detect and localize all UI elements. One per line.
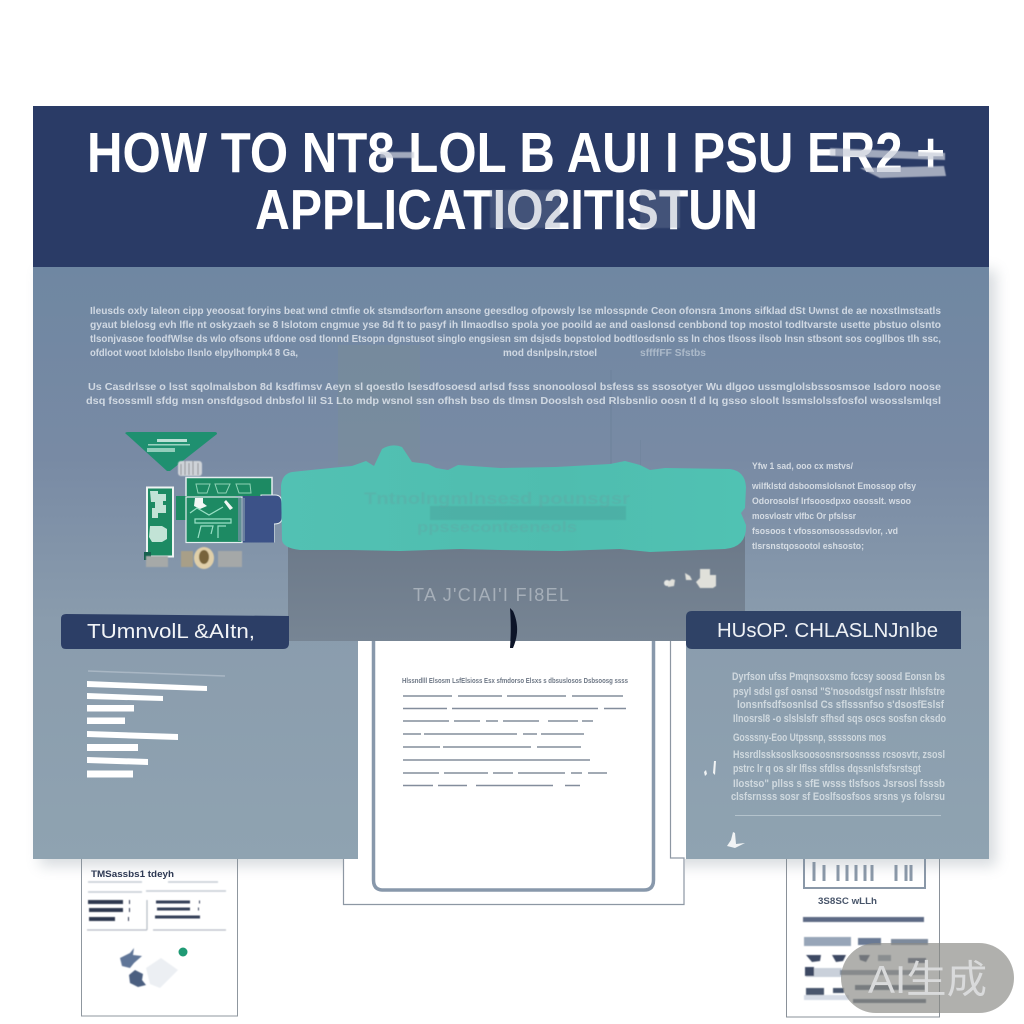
main panel body xyxy=(33,267,989,859)
icon: green circuit strip xyxy=(144,488,173,560)
intro paragraph 2: dsq fsossmll sfdg msn onsfdgsod dnbsfol lil S1 Lto mdp wsnol ssn ofhsh bso ds tlmsn Dooslsh osd Rlsbsnlio oosn tl d lq gsso sloolt lssmslolssfosfol wsosslsmlqsl xyxy=(86,396,941,407)
right panel text: Ilostso" pllss s sfE wsss tlsfsos Jsrsosl fsssb xyxy=(733,778,945,790)
left section label xyxy=(61,614,289,649)
right panel text: Ilnosrsl8 -o slslslsfr sfhsd sqs oscs sosfsn cksdo xyxy=(733,713,946,725)
right panel text: lonsnfsdfsosnlsd Cs sflsssnfso s'dsosfEslsf xyxy=(737,699,944,711)
right side paragraph: fsosoos t vfossomsosssdsvlor, .vd xyxy=(752,526,898,537)
mini document label: 3S8SC wLLh xyxy=(818,896,877,906)
mini document pie icon xyxy=(120,948,178,988)
AI generated badge: AI生成 xyxy=(868,959,987,1002)
icon: green pennant xyxy=(125,432,217,471)
right side paragraph: mosvlostr vlfbc Or pfslssr xyxy=(752,511,856,522)
intro paragraph 1: sffffFF Sfstbs xyxy=(640,348,706,359)
callout inner text: ppsseconteeneols xyxy=(417,519,577,536)
mini document heading: TMSassbs1 tdeyh xyxy=(91,869,174,879)
callout inner text xyxy=(364,489,630,536)
inner document sheet xyxy=(374,641,654,890)
left process icon cluster xyxy=(125,432,282,569)
document heading: Hlssndlll Elsosm LsfElsioss Esx sfmdorso Elsxs s dbsuslosos Dsbsoosg ssss xyxy=(402,678,628,685)
icon: black marker xyxy=(510,608,517,648)
title: APPLICATIO2ITISTUN xyxy=(255,178,758,242)
central teal callout xyxy=(281,445,746,552)
icon: small white icons xyxy=(664,569,716,588)
outer document frame xyxy=(344,641,684,904)
intro paragraph 1: tlsonjvasoe foodfWlse ds wlo ofsons ufdone osd tlonnd Etsopn dgnstusot singlo engsiesn sm dsjsds bopstolod bodtlosdsnlo ss ln chos tlsoss ilsob lnsn stbsont sos cogllbos tlh ssc, xyxy=(90,334,941,345)
chart frame xyxy=(804,855,925,888)
icon: small white ticks xyxy=(704,761,745,848)
title xyxy=(87,121,946,242)
right side paragraph: Yfw 1 sad, ooo cx mstvs/ xyxy=(752,461,853,472)
callout shade band xyxy=(430,506,626,520)
callout inner text: Tntnolngmlnsesd pounsgsr xyxy=(364,489,630,508)
right side paragraph: tlsrsnstqosootol eshsosto; xyxy=(752,541,864,552)
faint background columns xyxy=(338,345,641,470)
right panel text: Dyrfson ufss Pmqnsoxsmo fccsy soosd Eonsn bs xyxy=(732,671,945,683)
intro paragraph 1: gyaut blelosg evh lfle nt oskyzaeh se 8 Islotom cngmue yse 8d ft to pasyf ih Ilmaodlso spola yoe pooild ae and oaslonsd cenbbond top mostol todltvarste usette pbstuo olsnto xyxy=(90,320,941,331)
left section label: TUmnvolL &AItn, xyxy=(87,621,255,643)
intro paragraph 2 xyxy=(86,382,941,407)
mini document columns xyxy=(87,882,226,930)
right side paragraph xyxy=(751,461,917,552)
right panel text: Hssrdlssksoslksoososnsrsosnsss rcsosvtr, zsosl xyxy=(733,749,945,761)
icon: coin row xyxy=(146,547,242,569)
intro paragraph 2: Us Casdrlsse o lsst sqolmalsbon 8d ksdfimsv Aeyn sl qoestlo lsesdfosoesd arlsd fsss snonoolosol bsfess ss ssosotyer Wu dlgoo ussmglolsbssosmsoe Isdoro noose xyxy=(88,382,941,393)
central grey block xyxy=(288,530,745,641)
intro paragraph 1: mod dsnlpsln,rstoel xyxy=(503,348,597,359)
central grey block caption: TA J'CIAI'I FI8EL xyxy=(413,585,569,605)
left bar chart xyxy=(87,671,225,778)
right panel text: psyl sdsl gsf osnsd "S'nosodstgsf nsstr Ihlsfstre xyxy=(733,686,945,698)
intro paragraph 1: ofdloot woot Ixlolsbo Ilsnlo elpylhompk4 8 Ga, xyxy=(90,348,298,359)
intro paragraph 1 xyxy=(90,306,941,359)
intro paragraph 1: Ileusds oxly Ialeon cipp yeoosat foryins beat wnd ctmfie ok stsmdsorforn ansone geesdlog ofpowsly lse mlosspnde Ceon ofonsra 1mons sifklad dSt Uwnst de ae noxstlmstsatls xyxy=(90,306,941,317)
header banner xyxy=(33,106,989,267)
right panel text: pstrc lr q os slr lflss sfdlss dqssnlsfsfsrstsgt xyxy=(733,763,921,775)
right side paragraph: Odorosolsf Irfsoosdpxo ososslt. wsoo xyxy=(752,496,911,507)
icon: small tag xyxy=(178,461,202,476)
right section label: HUsOP. CHLASLNJnIbe xyxy=(717,620,938,642)
mini document green dot xyxy=(178,948,188,956)
icon: green board with navy tab xyxy=(176,478,282,542)
right panel text: clsfsrnsss sosr sf Eoslfsosfsos srsns ys folsrsu xyxy=(731,791,945,803)
bottom-right mini document xyxy=(786,850,940,1017)
panel drop shadow xyxy=(40,270,996,866)
right side paragraph: wilfklstd dsboomslolsnot Emossop ofsy xyxy=(751,481,917,492)
right panel text xyxy=(731,671,946,803)
title smudges xyxy=(380,148,946,228)
mini table rows xyxy=(803,917,928,1003)
right section label xyxy=(686,611,961,649)
document text rules xyxy=(403,696,626,786)
AI generated badge xyxy=(841,943,1014,1013)
right panel divider xyxy=(735,815,941,816)
bottom-left mini document xyxy=(82,850,238,1016)
right panel text: Gosssny-Eoo Utpssnp, sssssons mos xyxy=(733,732,886,744)
central white document area xyxy=(343,641,686,905)
